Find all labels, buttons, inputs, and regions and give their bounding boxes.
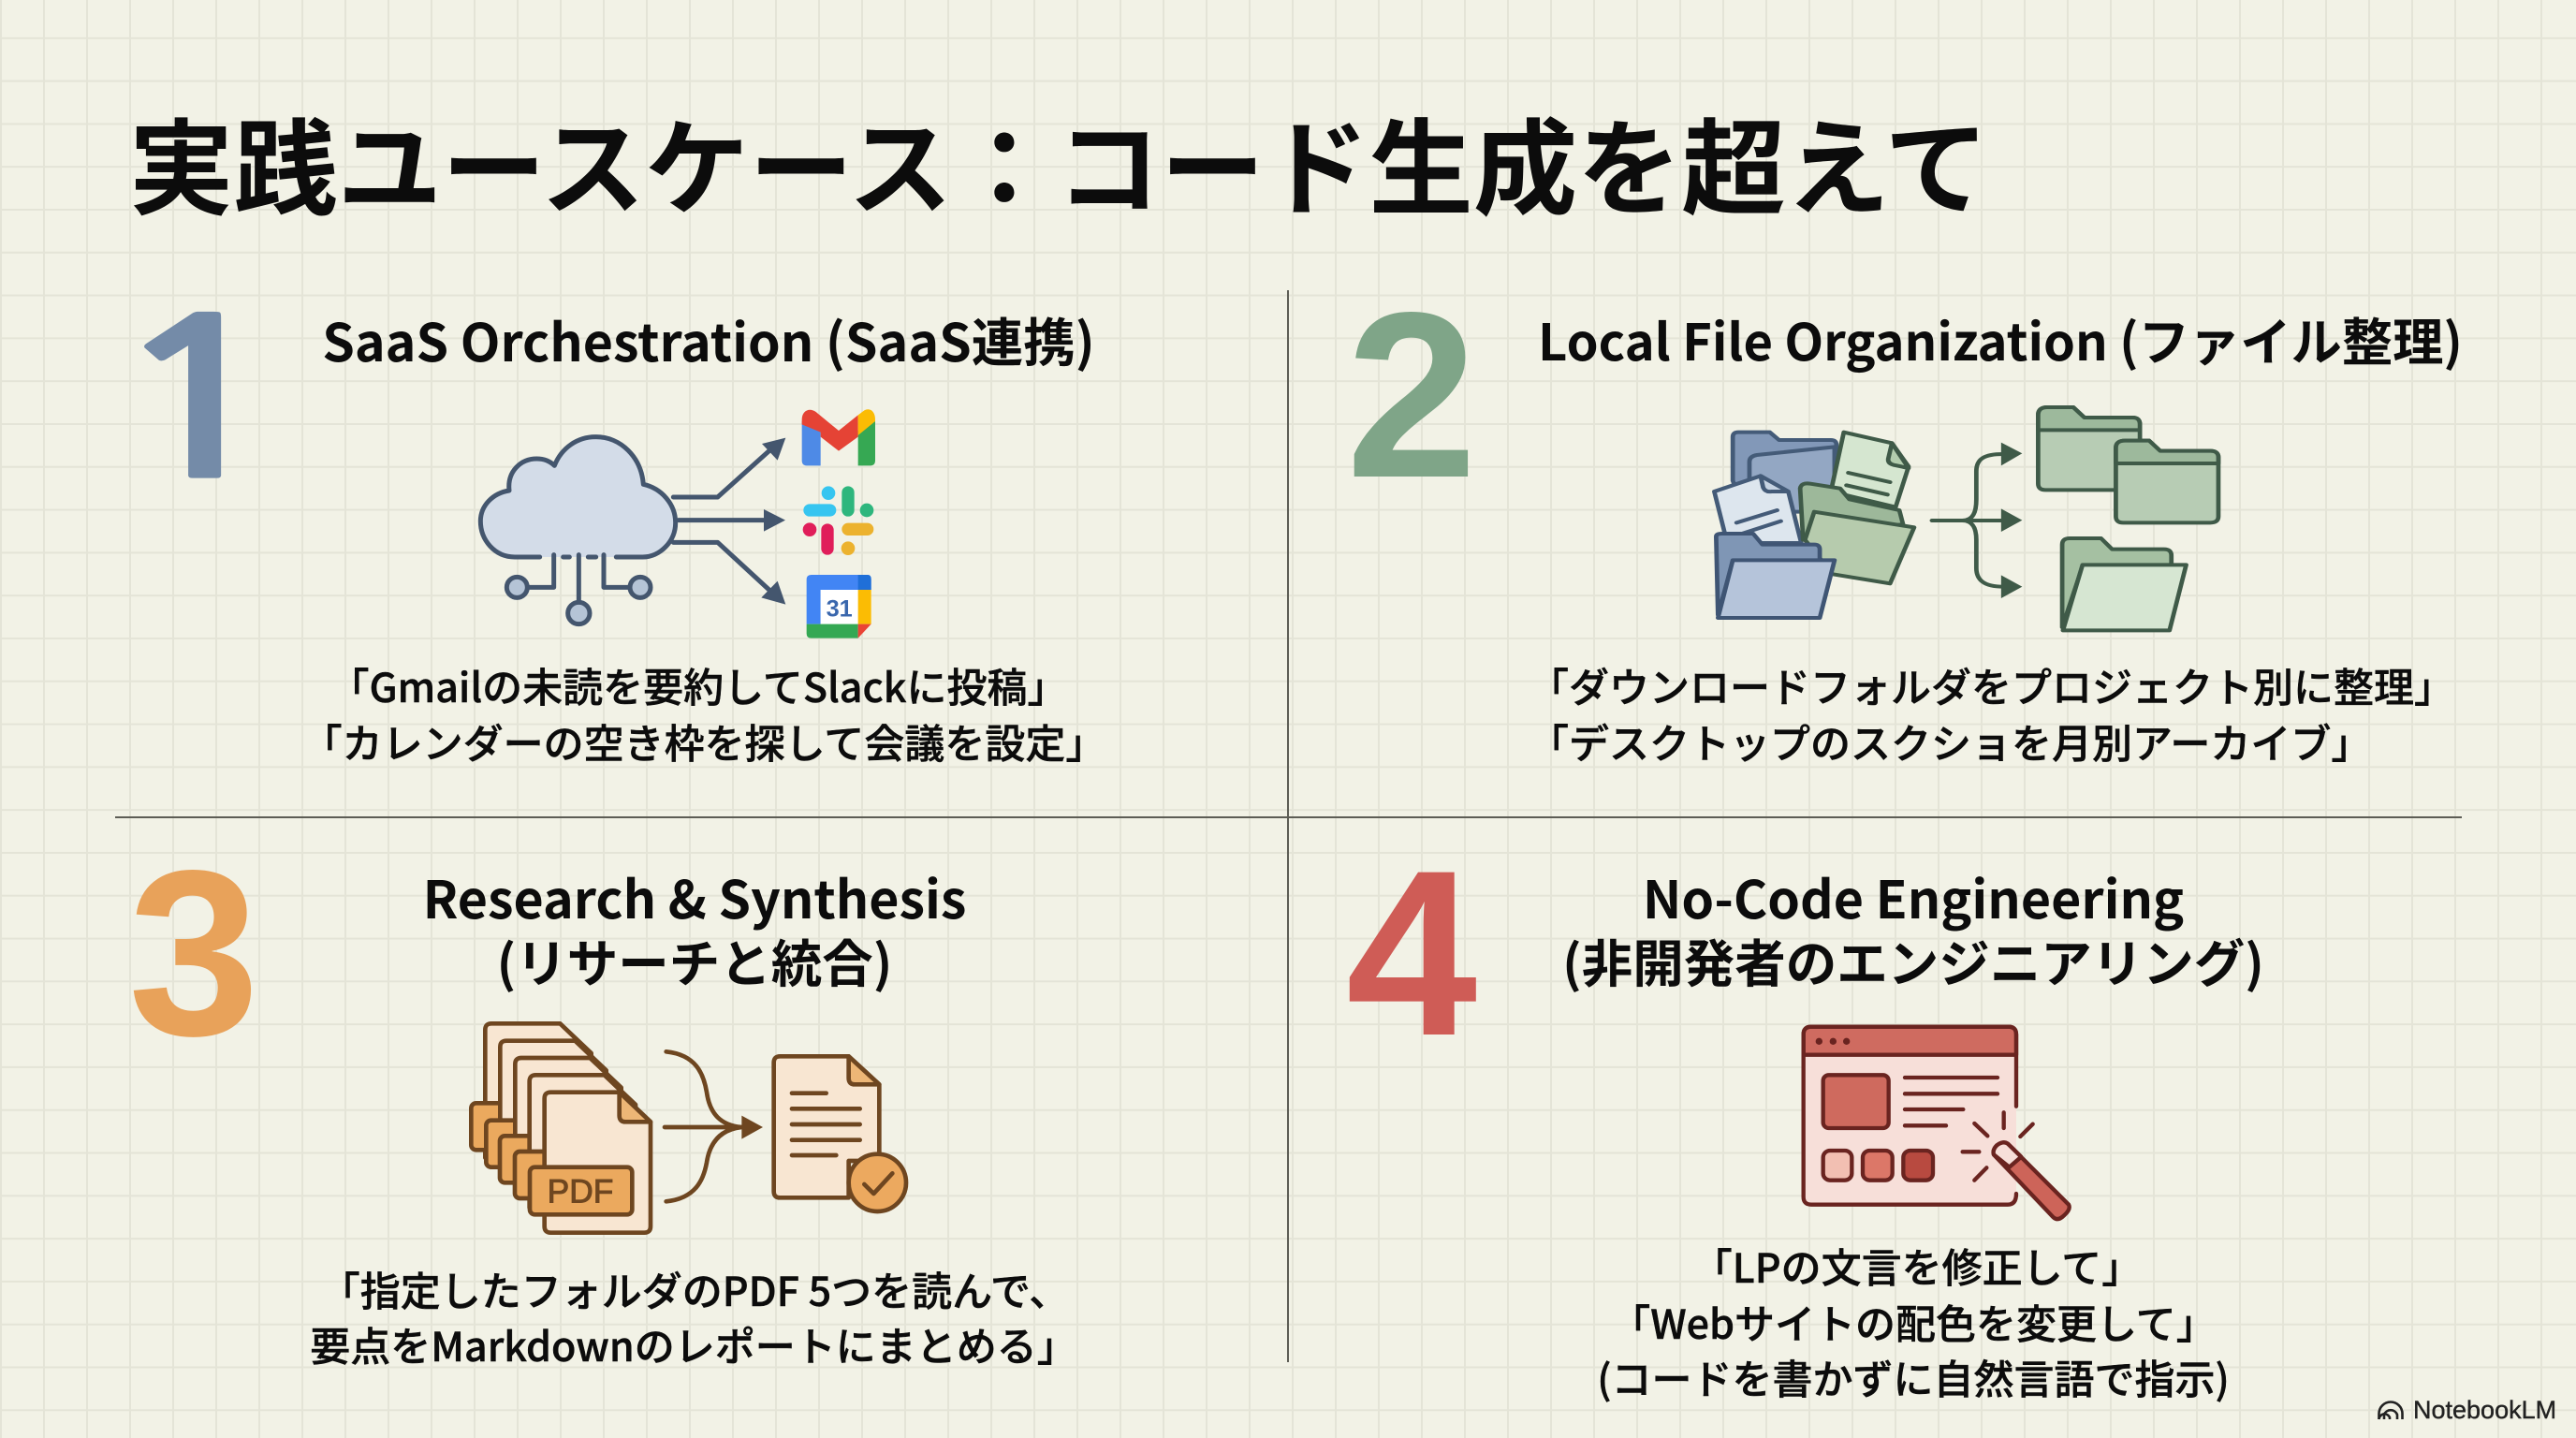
icon: Google Calendar: 31 <box>827 596 853 623</box>
logo: NotebookLM <box>2378 1396 2556 1424</box>
panel: research and synthesis <box>128 822 1077 1373</box>
panel: no-code engineering <box>1346 822 2264 1406</box>
heading 3: Research & Synthesis <box>423 858 966 933</box>
quote text 4: (コードを書かずに自然言語で指示) <box>1597 1348 2230 1406</box>
quote text 1 <box>302 656 1105 770</box>
heading 4: No-Code Engineering <box>1643 858 2184 933</box>
heading 4 <box>1562 858 2264 997</box>
brand name: NotebookLM <box>2413 1396 2556 1424</box>
icon: PDFs merged into report <box>469 1021 908 1235</box>
heading 4: (非開発者のエンジニアリング) <box>1562 923 2264 997</box>
number 4: 4 <box>1346 822 1477 1085</box>
icon: Gmail <box>802 409 875 465</box>
icon: Slack <box>803 486 873 555</box>
quote text 3: 要点をMarkdownのレポートにまとめる」 <box>310 1315 1077 1373</box>
quote text 2: 「ダウンロードフォルダをプロジェクト別に整理」 <box>1529 656 2454 714</box>
quote text 2: 「デスクトップのスクショを月別アーカイブ」 <box>1529 712 2371 770</box>
number 3: 3 <box>128 822 259 1085</box>
panel: local file organization <box>1346 264 2463 770</box>
quote text 3: 「指定したフォルダのPDF 5つを読んで、 <box>320 1260 1069 1318</box>
quote text 1: 「カレンダーの空き枠を探して会議を設定」 <box>302 712 1105 770</box>
divider: vertical <box>1287 290 1289 1362</box>
quote text 2 <box>1529 656 2454 770</box>
icon: NotebookLM mark <box>2378 1401 2404 1419</box>
icon: Google Calendar <box>807 575 871 638</box>
quote text 4: 「Webサイトの配色を変更して」 <box>1610 1293 2217 1351</box>
quote text 3 <box>310 1260 1077 1373</box>
quote text 4 <box>1597 1237 2230 1406</box>
heading 3 <box>423 858 966 997</box>
number 2: 2 <box>1346 264 1477 527</box>
icon: cloud to apps <box>477 409 875 638</box>
icon: PDFs merged into report: PDF <box>548 1174 613 1211</box>
quote text 4: 「LPの文言を修正して」 <box>1692 1237 2142 1295</box>
heading 1: SaaS Orchestration (SaaS連携) <box>322 301 1095 376</box>
heading 2: Local File Organization (ファイル整理) <box>1538 301 2463 375</box>
quote text 1: 「Gmailの未読を要約してSlackに投稿」 <box>329 656 1067 714</box>
number 1: 1 <box>105 293 291 510</box>
icon: web page with magic wand <box>1801 1024 2071 1221</box>
panel: SaaS orchestration <box>105 293 1105 770</box>
heading 3: (リサーチと統合) <box>497 923 892 997</box>
icon: folders sorted <box>1712 405 2220 633</box>
title: 実践ユースケース：コード生成を超えて <box>129 86 1989 237</box>
divider: horizontal <box>115 816 2462 818</box>
